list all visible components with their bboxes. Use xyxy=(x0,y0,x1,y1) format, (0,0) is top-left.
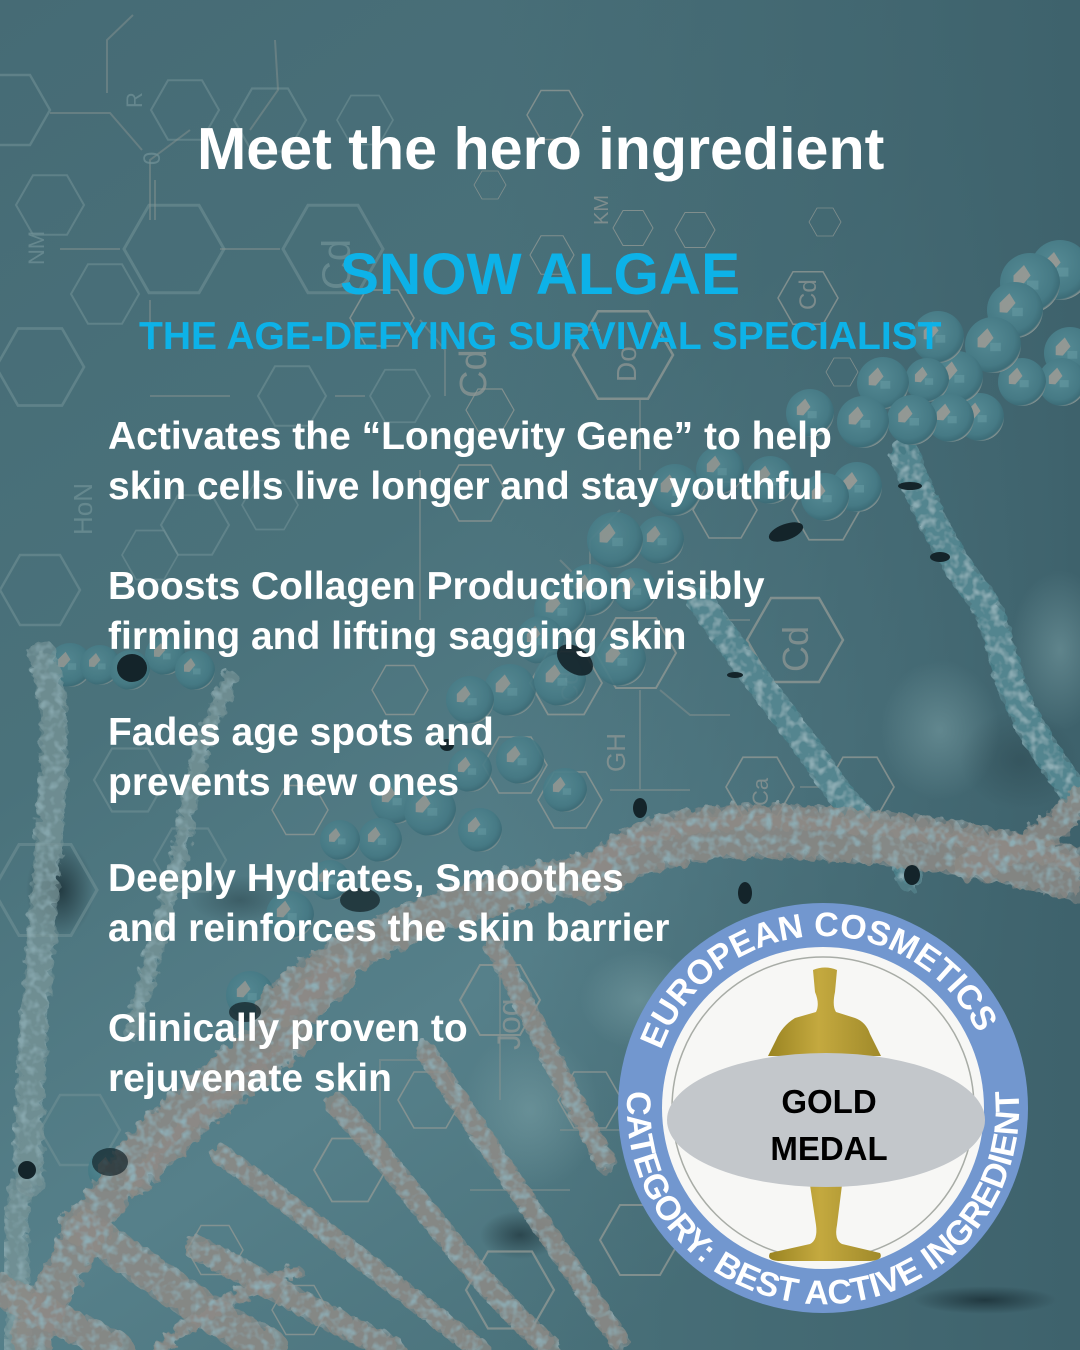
benefit: collagen xyxy=(108,565,765,658)
molecule labels: Cd xyxy=(795,279,822,310)
molecule labels: Cd xyxy=(453,349,495,398)
benefit: age spots: Fades age spots and xyxy=(108,711,494,754)
benefit: collagen: firming and lifting sagging skin xyxy=(108,615,687,658)
molecule labels: R xyxy=(122,92,147,108)
molecule labels: Ca xyxy=(748,777,773,806)
benefit: longevity gene xyxy=(108,415,832,508)
molecule connector lines xyxy=(50,15,830,1190)
DNA strand: upper right large beads xyxy=(786,240,1080,521)
benefit: hydration: and reinforces the skin barrier xyxy=(108,907,669,950)
benefit: age spots xyxy=(108,711,494,804)
molecule hexagon network xyxy=(0,75,894,1334)
benefit: hydration: Deeply Hydrates, Smoothes xyxy=(108,857,624,900)
benefit: clinically proven xyxy=(108,1007,468,1100)
molecule labels xyxy=(24,92,822,1050)
molecule labels: NM xyxy=(24,231,49,265)
medal label xyxy=(770,1083,888,1167)
molecule labels: Cd xyxy=(315,239,359,290)
medal ring xyxy=(618,903,1028,1313)
benefit: collagen: Boosts Collagen Production visibly xyxy=(108,565,765,608)
curved ring text xyxy=(626,912,1020,1304)
dark bead shadows xyxy=(18,482,950,1179)
DNA strands: tan beaded bands xyxy=(0,800,1080,1350)
DNA strands: left grey-teal bands xyxy=(15,655,230,1350)
curved ring text: EUROPEAN COSMETICS xyxy=(640,912,996,1048)
benefit: clinically proven: rejuvenate skin xyxy=(108,1057,392,1100)
benefit: longevity gene: Activates the “Longevity Gene” to help xyxy=(108,415,832,458)
molecule labels: Cd xyxy=(557,671,584,702)
molecule labels: Do xyxy=(611,346,642,382)
molecule labels: 0 xyxy=(139,152,166,165)
gold statuette xyxy=(768,968,881,1261)
medal label: GOLD xyxy=(781,1083,877,1120)
curved ring text: CATEGORY: BEST ACTIVE INGREDIENT xyxy=(626,1092,1020,1304)
molecule labels: Cd xyxy=(775,626,816,672)
title: Meet the hero ingredient xyxy=(197,115,884,182)
benefit: age spots: prevents new ones xyxy=(108,761,459,804)
benefit: longevity gene: skin cells live longer and stay youthful xyxy=(108,465,823,508)
molecule labels: KM xyxy=(591,195,613,225)
product name: snow algae: SNOW ALGAE xyxy=(340,242,740,307)
subtitle: THE AGE-DEFYING SURVIVAL SPECIALIST xyxy=(139,315,942,358)
DNA strands: teal bead clusters xyxy=(700,455,1080,880)
benefit: hydration xyxy=(108,857,669,950)
medal grey oval xyxy=(667,1053,985,1187)
molecule labels: GH xyxy=(601,733,631,772)
DNA strands: central bead clusters xyxy=(48,446,794,1192)
medal label: MEDAL xyxy=(770,1130,888,1167)
molecule labels: Jog xyxy=(491,998,527,1050)
benefit: clinically proven: Clinically proven to xyxy=(108,1007,468,1050)
bokeh glows xyxy=(26,570,1080,1314)
molecule labels: HoN xyxy=(68,483,98,535)
